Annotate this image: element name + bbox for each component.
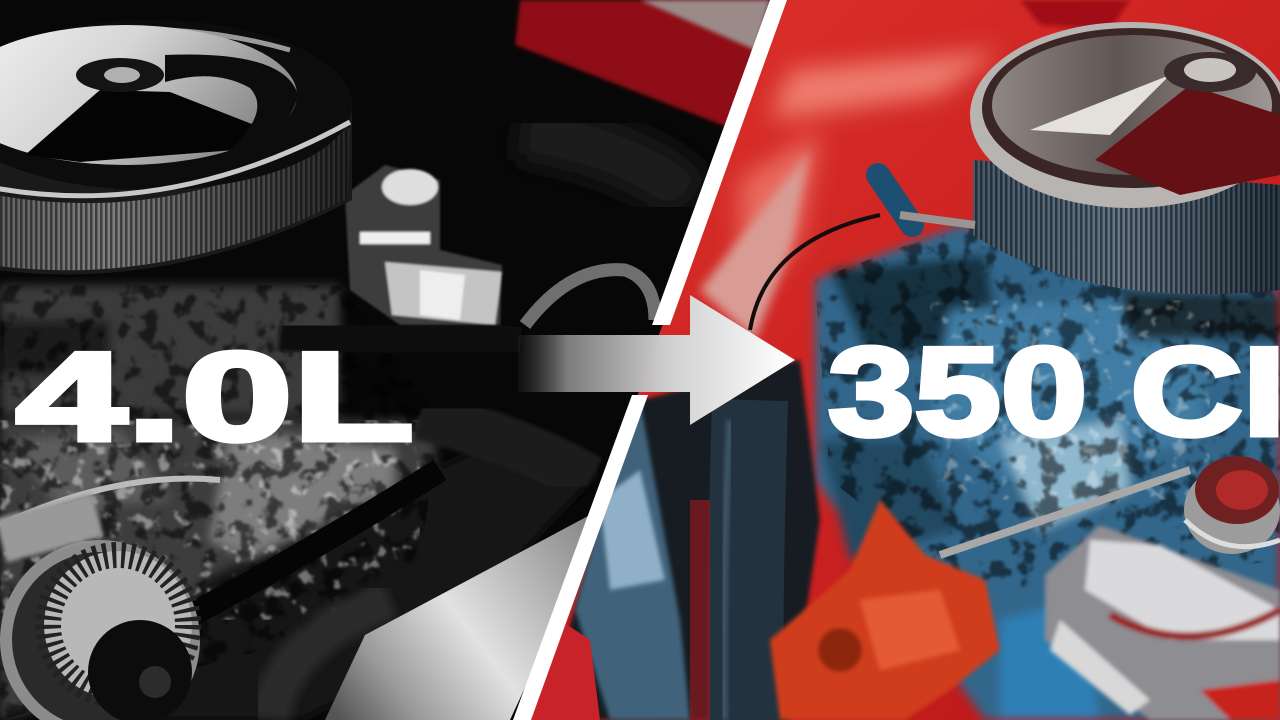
red alternator bracket xyxy=(770,500,1000,720)
belt xyxy=(0,478,220,525)
oil cap xyxy=(1184,456,1280,554)
blue engine block xyxy=(815,225,1280,720)
chrome manifold parts xyxy=(345,165,502,325)
arrow xyxy=(518,295,795,425)
sensor hose xyxy=(878,175,912,225)
wedge reflection xyxy=(325,515,590,720)
chrome pushrod line xyxy=(940,470,1190,555)
engine grime texture xyxy=(0,285,450,720)
red valve cover accent xyxy=(515,0,770,128)
label: 350 CID: 350 CID xyxy=(828,321,1280,462)
air cleaner right xyxy=(970,22,1280,294)
red fender highlights xyxy=(740,50,1000,310)
blue engine grime texture xyxy=(810,220,1280,600)
engine block shading xyxy=(0,285,600,720)
pulley xyxy=(0,540,200,720)
hose xyxy=(745,400,750,720)
chrome valve cover xyxy=(1045,525,1280,720)
panel: color engine xyxy=(500,0,1280,720)
dark machinery left edge xyxy=(540,360,820,720)
panel: black and white engine xyxy=(0,0,800,720)
hose xyxy=(525,270,655,325)
blue engine highlights texture xyxy=(930,300,1210,500)
blue bracket xyxy=(575,400,690,720)
engine highlights texture xyxy=(0,420,420,620)
divider line xyxy=(513,0,787,720)
air cleaner left xyxy=(0,20,352,274)
label: 4.0L: 4.0L xyxy=(16,326,414,467)
